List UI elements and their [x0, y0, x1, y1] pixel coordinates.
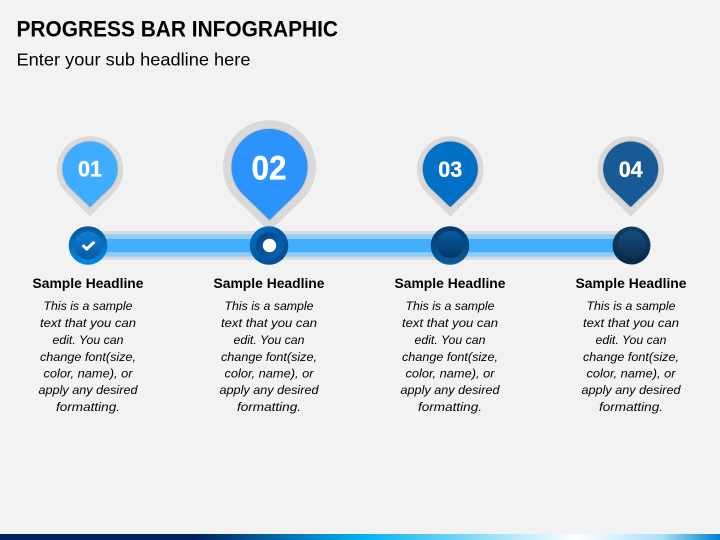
body 2: edit. You can [234, 333, 305, 347]
body 3: color, name), or [406, 366, 495, 380]
milestone 4: pending node [612, 226, 650, 264]
body 1: text that you can [40, 316, 136, 330]
body 4: color, name), or [586, 366, 676, 380]
body 3: formatting. [418, 400, 482, 414]
footer gradient strip [0, 534, 720, 540]
body 1: color, name), or [44, 366, 133, 380]
body 3: edit. You can [414, 333, 486, 347]
body 4: text that you can [583, 316, 679, 330]
pin 01 [57, 136, 123, 217]
body 4: edit. You can [596, 333, 667, 347]
heading 1: Sample Headline [32, 275, 144, 291]
text block 3 [394, 275, 506, 414]
body 3: This is a sample [406, 299, 495, 313]
body 4: change font(size, [583, 350, 679, 364]
body 3: apply any desired [400, 383, 501, 397]
body 2: text that you can [221, 316, 317, 330]
body 1: apply any desired [38, 383, 139, 397]
number 01: 01 [78, 157, 102, 182]
body 3: text that you can [402, 316, 498, 330]
milestone 2: active node [250, 226, 288, 265]
milestone 3: pending node [431, 226, 469, 265]
body 2: formatting. [237, 400, 301, 414]
body 1 [38, 299, 139, 414]
icon: check mark [83, 242, 94, 249]
body 3 [400, 299, 501, 414]
heading 4: Sample Headline [576, 275, 687, 291]
body 2: change font(size, [221, 350, 317, 364]
title: PROGRESS BAR INFOGRAPHIC [16, 16, 338, 42]
number 04: 04 [619, 157, 643, 182]
body 1: change font(size, [40, 350, 136, 364]
subtitle: Enter your sub headline here [16, 50, 250, 70]
progress bar track [88, 231, 631, 260]
milestone 1: completed check node [69, 226, 107, 265]
body 2: apply any desired [220, 383, 320, 397]
heading 2: Sample Headline [214, 275, 325, 291]
body 2: This is a sample [224, 299, 314, 313]
number 02: 02 [252, 149, 286, 187]
body 2: color, name), or [224, 366, 314, 380]
pin 02 [223, 120, 316, 232]
pin 04 [597, 136, 664, 217]
number 03: 03 [438, 157, 462, 182]
body 4: This is a sample [586, 299, 676, 313]
text block 2 [214, 275, 325, 414]
body 2 [220, 299, 320, 414]
body 4: formatting. [599, 400, 663, 414]
body 3: change font(size, [402, 350, 498, 364]
text block 1 [32, 275, 144, 414]
heading 3: Sample Headline [394, 275, 506, 291]
body 4 [582, 299, 682, 414]
pin 03 [417, 136, 484, 217]
icon: white dot [263, 239, 276, 252]
body 1: formatting. [56, 400, 120, 414]
body 1: edit. You can [52, 333, 124, 347]
body 4: apply any desired [582, 383, 682, 397]
body 1: This is a sample [44, 299, 133, 313]
text block 4 [576, 275, 687, 414]
